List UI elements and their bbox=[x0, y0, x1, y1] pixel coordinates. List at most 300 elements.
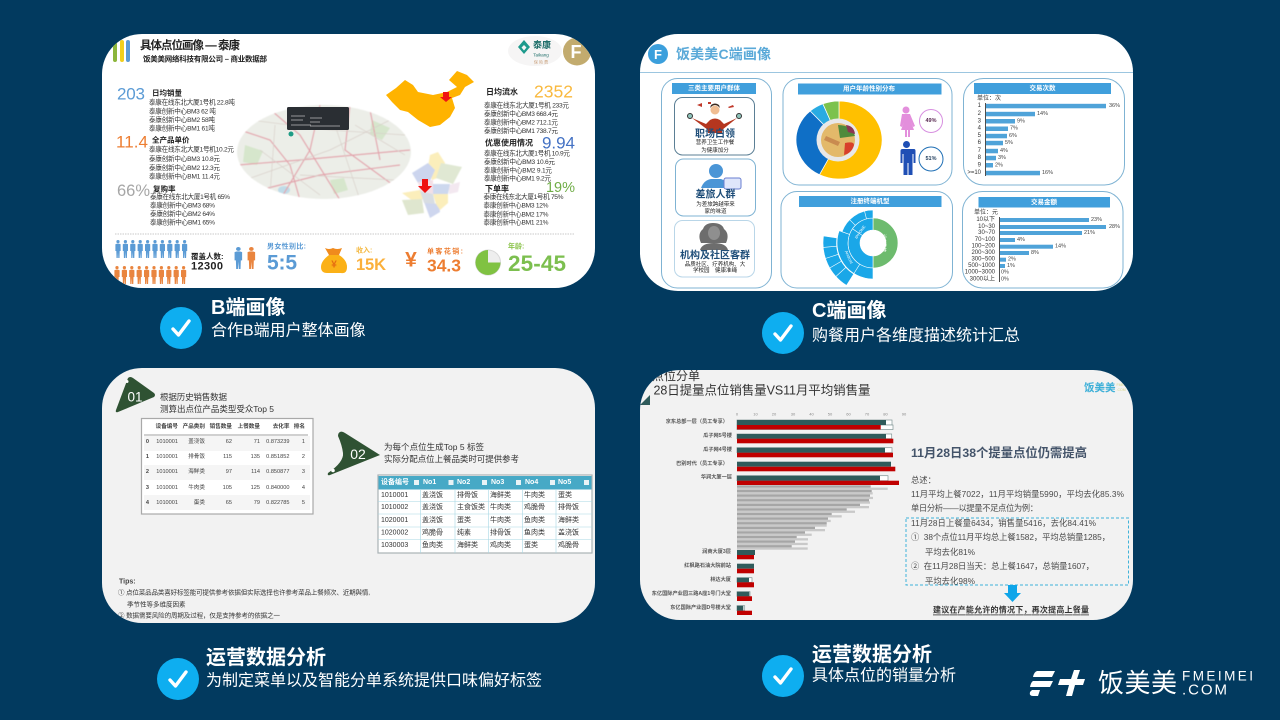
tips bbox=[118, 578, 370, 620]
heading bar: 交易金额 bbox=[1031, 197, 1058, 206]
bar chart: trade amount: 10~30 bbox=[978, 224, 996, 230]
logo mark bbox=[1030, 670, 1085, 696]
table: labels per point: 牛肉类 bbox=[490, 515, 511, 524]
table: labels per point: 排骨饭 bbox=[457, 490, 478, 499]
metric: unit price bbox=[116, 132, 234, 180]
table: top 5: 0.850877 bbox=[266, 469, 290, 475]
bar chart: trade count: 2 bbox=[978, 111, 982, 117]
table: labels per point: 设备编号 bbox=[381, 477, 409, 486]
table: top 5: 设备编号 bbox=[156, 422, 178, 430]
card: device sunburst bbox=[781, 192, 952, 288]
icon: male bbox=[899, 141, 916, 175]
table: top 5: 3 bbox=[146, 485, 149, 491]
logo: Taikang: 保 险 费 bbox=[534, 58, 548, 64]
logo bbox=[1084, 381, 1131, 394]
bar chart: trade amount: 100~200 bbox=[971, 244, 996, 250]
metric: daily sales: 泰康创新中心BM1 61吨 bbox=[149, 124, 215, 132]
table: top 5: 79 bbox=[254, 500, 260, 506]
table: top 5: 去化率 bbox=[273, 422, 290, 430]
tooltip on map bbox=[287, 107, 349, 136]
axis ticks: 90 bbox=[902, 412, 907, 416]
panel: C端画像 bbox=[640, 34, 1133, 291]
sunburst labels: 设备品牌 bbox=[880, 234, 888, 252]
metric: discount use bbox=[484, 134, 575, 182]
text block: summary bbox=[911, 475, 1125, 513]
table: top 5: 1010001 bbox=[156, 469, 178, 475]
caption: 运营数据分析 2: 具体点位的销量分析 bbox=[812, 666, 956, 684]
axis ticks: 50 bbox=[828, 412, 833, 416]
logo: F badge: F bbox=[570, 42, 582, 62]
table: labels per point: 鱼肉类 bbox=[524, 528, 545, 536]
gauge: male share bbox=[919, 147, 943, 171]
heading bar bbox=[974, 83, 1111, 94]
text block: summary: 单日分析——以提量不足点位为例： bbox=[911, 503, 1038, 513]
table: top 5: 5 bbox=[302, 500, 305, 506]
table: top 5: 海鲜类 bbox=[188, 467, 205, 475]
metric: daily revenue: 2352 bbox=[534, 82, 573, 102]
group card: institutions: 学校园 健康准绳 bbox=[693, 266, 737, 274]
title: 具体点位画像 — 泰康 bbox=[140, 38, 240, 52]
gauge: female share: 49% bbox=[925, 118, 937, 124]
axis ticks: 60 bbox=[846, 412, 851, 416]
stat: coverage: 12300 bbox=[191, 260, 223, 272]
table: top 5: 2 bbox=[302, 454, 305, 460]
icon: check bbox=[160, 307, 202, 349]
bar chart: trade count: 6 bbox=[978, 140, 982, 146]
bar labels: 润商大厦3层 bbox=[702, 547, 731, 555]
stat: income bbox=[356, 246, 386, 270]
bar chart: trade count: 7 bbox=[978, 148, 982, 154]
icon: check bbox=[157, 658, 199, 700]
stat: income: 收入: bbox=[356, 246, 372, 254]
axis ticks: 40 bbox=[809, 412, 814, 416]
table: top 5: 0.873239 bbox=[266, 439, 290, 445]
food plate bbox=[816, 118, 860, 162]
heading bar: 用户年龄性别分布 bbox=[843, 84, 896, 92]
metric: unit price: 11.4 bbox=[116, 132, 148, 152]
stat: spend per customer: 单客花销: bbox=[427, 246, 463, 256]
table: top 5: 0.822785 bbox=[266, 500, 290, 506]
group card: travellers bbox=[676, 159, 756, 216]
table: top 5 bbox=[142, 418, 313, 514]
heading bar bbox=[672, 83, 756, 94]
group card: office workers: 营养卫生工作餐 bbox=[696, 138, 735, 146]
logo: .COM bbox=[1116, 388, 1126, 392]
metric: repurchase rate: 泰康在线东北大厦1号机 65% bbox=[150, 192, 230, 201]
metric: daily sales: 泰康创新中心BM3 62 吨 bbox=[149, 106, 216, 116]
panel: B端画像 bbox=[102, 34, 595, 288]
heading bar bbox=[798, 84, 942, 94]
bar chart: trade amount: 70~100 bbox=[975, 237, 996, 243]
table: labels per point: 纯素 bbox=[457, 528, 471, 536]
sunburst labels: Android bbox=[844, 250, 854, 264]
metric: unit price: 泰康在线东北大厦1号机10.2元 bbox=[149, 144, 234, 154]
card: trade count bbox=[964, 78, 1124, 185]
axis ticks: 20 bbox=[772, 412, 777, 416]
table: labels per point: 1020001 bbox=[381, 517, 408, 524]
divider bbox=[640, 72, 1133, 73]
subtitle: 饭美美网络科技有限公司 – 商业数据部 bbox=[143, 54, 268, 64]
metric: repurchase rate: 泰康创新中心BM3 68% bbox=[150, 200, 215, 210]
table: top 5: 产品类别 bbox=[183, 422, 205, 430]
bar chart: trade count: 36% bbox=[1109, 103, 1120, 109]
logo: Fmeimei: FMEIMEI bbox=[1182, 668, 1253, 684]
table: labels per point: 海鲜类 bbox=[457, 540, 478, 549]
bar labels: 华润大厦一层 bbox=[701, 473, 732, 481]
stat: spend per customer bbox=[427, 247, 462, 272]
metric: repurchase rate: 复购率 bbox=[153, 184, 176, 194]
heading bar bbox=[978, 197, 1110, 208]
metric: order rate: 泰康创新中心BM3 12% bbox=[484, 200, 549, 210]
sunburst labels: IPHONE bbox=[854, 224, 867, 240]
axis ticks: 80 bbox=[883, 412, 888, 416]
stat: gender ratio: 5:5 bbox=[267, 252, 297, 274]
bar chart: trade count: 1 bbox=[978, 103, 982, 109]
tag fragment bbox=[640, 395, 650, 405]
metric: daily sales: 203 bbox=[117, 84, 145, 104]
stat: income: 15K bbox=[356, 256, 386, 274]
tag 02: 02 bbox=[350, 446, 366, 462]
bar chart: trade count: 4% bbox=[1000, 148, 1008, 154]
bar chart: trade amount: 200~300 bbox=[971, 250, 996, 256]
table: top 5: 97 bbox=[226, 469, 232, 475]
metric: order rate: 泰康创新中心BM1 21% bbox=[484, 218, 549, 226]
callout: dashed box: 平均去化98% bbox=[925, 576, 976, 586]
bar chart: trade amount: 28% bbox=[1109, 224, 1120, 230]
icon group: blue people bbox=[115, 240, 187, 258]
table: labels per point: 盖浇饭 bbox=[422, 515, 443, 524]
table: labels per point: 鸡肉类 bbox=[490, 540, 511, 549]
table: top 5: 114 bbox=[251, 469, 260, 475]
recommendation: 建议在产能允许的情况下，再次提高上餐量 bbox=[933, 604, 1089, 614]
bar chart: trade amount bbox=[965, 216, 1120, 283]
metric: order rate: 下单率 bbox=[485, 184, 509, 194]
metric: order rate: 泰康在线东北大厦1号机 75% bbox=[484, 192, 564, 201]
caption: C端画像: 购餐用户各维度描述统计汇总 bbox=[812, 326, 1020, 344]
table: labels per point: 蛋类 bbox=[524, 540, 538, 549]
text block: summary: 总述： bbox=[911, 475, 936, 485]
logo: FMEIMEI bbox=[1116, 383, 1131, 387]
panel: 点位分单 bbox=[640, 368, 1133, 620]
grey bars bbox=[737, 488, 888, 550]
bar labels: 京东总部一层（员工专享） bbox=[666, 417, 728, 425]
heading: analysis: 11月28日38个提量点位仍需提高 bbox=[911, 445, 1087, 460]
bar chart: trade count: 16% bbox=[1042, 170, 1053, 176]
title: 饭美美C端画像 bbox=[676, 46, 771, 62]
table: labels per point: 盖浇饭 bbox=[422, 490, 443, 499]
title: 28日提量点位销售量VS11月平均销售量 bbox=[654, 382, 870, 398]
callout: dashed box: 11月28日上餐量6434，销售量5416，去化84.41% bbox=[911, 518, 1097, 528]
stat: coverage bbox=[191, 252, 223, 270]
caption: 运营数据分析 1: 为制定菜单以及智能分单系统提供口味偏好标签 bbox=[206, 672, 542, 690]
table: top 5: 2 bbox=[146, 469, 149, 475]
donut chart bbox=[796, 101, 882, 179]
bar chart: trade count: 8 bbox=[978, 155, 982, 161]
bar chart: trade amount: 21% bbox=[1084, 230, 1095, 236]
bar chart: trade count: 7% bbox=[1010, 126, 1018, 132]
metric: discount use: 泰康创新中心BM1 9.2元 bbox=[484, 174, 551, 182]
caption: 运营数据分析 2: 运营数据分析 bbox=[812, 643, 932, 666]
metric: repurchase rate bbox=[117, 182, 230, 226]
table: top 5: 135 bbox=[251, 454, 260, 460]
metric: unit price: 全产品单价 bbox=[152, 134, 190, 144]
table: labels per point: No5 bbox=[558, 479, 571, 486]
logo: Taikang: 泰康 bbox=[533, 39, 551, 50]
table: labels per point: 排骨饭 bbox=[490, 528, 511, 536]
gauge: male share: 51% bbox=[925, 156, 937, 162]
table: labels per point: 排骨饭 bbox=[558, 502, 579, 511]
metric: order rate: 泰康创新中心BM2 17% bbox=[484, 210, 549, 218]
logo: Fmeimei bbox=[1030, 668, 1253, 698]
caption: 运营数据分析 2 bbox=[762, 643, 956, 697]
heading bar: 三类主要用户群体 bbox=[688, 83, 740, 92]
caption: B端画像 bbox=[160, 296, 366, 349]
table: top 5: 销售数量 bbox=[210, 422, 232, 430]
bar chart: trade count: 3% bbox=[998, 155, 1006, 161]
arrow: down bbox=[1004, 585, 1021, 602]
table: labels per point: 鸡脆骨 bbox=[558, 540, 579, 549]
bar chart: trade amount: 8% bbox=[1031, 250, 1039, 256]
bar chart: trade count: 5 bbox=[978, 133, 982, 139]
bar labels bbox=[652, 417, 733, 611]
table: top 5: 上餐数量 bbox=[238, 422, 260, 430]
table: labels per point: No3 bbox=[491, 479, 504, 486]
bar chart: trade amount: 300~500 bbox=[971, 257, 996, 263]
unit: 单位：元 bbox=[974, 208, 998, 216]
gauge: female share bbox=[920, 110, 942, 132]
table: top 5: 65 bbox=[226, 500, 232, 506]
unit: 单位：次 bbox=[977, 94, 1001, 102]
metric: daily revenue bbox=[484, 82, 573, 135]
caption: B端画像: 合作B端用户整体画像 bbox=[211, 322, 366, 340]
table: top 5: 4 bbox=[146, 500, 150, 506]
group card: institutions bbox=[674, 220, 754, 277]
text block: summary: 11月平均上餐7022，11月平均销量5990，平均去化85.3% bbox=[911, 489, 1125, 499]
bar chart: point sales bbox=[737, 420, 899, 615]
metric: daily revenue: 泰康创新中心BM2 712.1元 bbox=[484, 118, 558, 126]
bar chart: trade amount: 10以下 bbox=[976, 216, 995, 223]
table: labels per point: 1010002 bbox=[381, 504, 408, 511]
group card: office workers bbox=[674, 98, 754, 155]
stat: age bbox=[508, 242, 566, 271]
caption: C端画像: C端画像 bbox=[812, 299, 886, 322]
bar chart: trade amount: 14% bbox=[1055, 244, 1066, 250]
bar chart: trade count: 3 bbox=[978, 118, 982, 124]
bar chart: trade count: 2% bbox=[995, 162, 1003, 168]
step 2 text: 实际分配点位上餐品类时可提供参考 bbox=[384, 454, 519, 464]
caption: 运营数据分析 1: 运营数据分析 bbox=[206, 646, 326, 669]
icon: yen: ¥ bbox=[405, 248, 417, 272]
table: top 5: 0 bbox=[146, 439, 149, 445]
logo: Taikang bbox=[508, 36, 562, 66]
caption: 运营数据分析 1 bbox=[157, 646, 542, 700]
metric: discount use: 9.94 bbox=[542, 134, 575, 152]
bar chart: trade count: 4 bbox=[978, 126, 982, 132]
step 1 text: 根据历史销售数据 bbox=[160, 392, 227, 402]
map: Beijing districts bbox=[402, 152, 462, 218]
icon: female bbox=[900, 106, 915, 137]
table: top 5: 3 bbox=[302, 469, 305, 475]
stat: gender ratio bbox=[267, 242, 306, 270]
table: top 5: 1 bbox=[146, 454, 149, 460]
bar chart: trade amount: 1000~3000 bbox=[965, 270, 996, 276]
tips: 季节性等多维度因素 bbox=[127, 600, 186, 608]
title bbox=[652, 368, 870, 398]
table: top 5: 125 bbox=[251, 485, 260, 491]
panel: 口味标签分析 bbox=[102, 368, 595, 623]
tag 01 bbox=[116, 377, 155, 412]
step 1 text bbox=[160, 392, 274, 414]
metric: discount use: 优惠使用情况 bbox=[485, 138, 533, 148]
icon group: orange people bbox=[114, 266, 186, 284]
stat: spend per customer: 34.3 bbox=[427, 256, 461, 276]
bar chart: trade amount: 30~70 bbox=[978, 230, 996, 236]
heading bar: 注册终端机型 bbox=[850, 196, 890, 205]
icon: red location arrow bbox=[418, 179, 432, 193]
bar labels: 瓜子网4号楼 bbox=[703, 445, 733, 453]
table: labels per point: 鱼肉类 bbox=[524, 515, 545, 524]
group card: travellers: 为差旅跨越带来 bbox=[696, 200, 735, 208]
table: top 5: 105 bbox=[223, 485, 232, 491]
icon: three colour bars bbox=[113, 40, 130, 62]
sunburst labels bbox=[844, 224, 888, 264]
bar chart: trade amount: 0% bbox=[1001, 270, 1009, 276]
metric: daily revenue: 日均流水 bbox=[486, 86, 518, 96]
icon: money bag: ¥ bbox=[331, 260, 337, 270]
bar labels: 东亿国际产业园D号楼大堂 bbox=[670, 603, 731, 611]
group card: office workers: 为健康加分 bbox=[701, 146, 729, 154]
group card: institutions: 品质社区、疗养机构、大 bbox=[685, 260, 746, 268]
table: top 5: 71 bbox=[254, 439, 260, 445]
table: top 5: 1 bbox=[302, 439, 305, 445]
tips: ② 数据需要风险的周期及过程，仅是支持参考的依据之一 bbox=[118, 610, 280, 620]
metric: daily sales: 泰康在线东北大厦1号机 22.8吨 bbox=[149, 98, 235, 106]
bar chart: trade amount: 3000以上 bbox=[970, 275, 995, 283]
metric: discount use: 泰康创新中心BM2 9.1元 bbox=[484, 166, 552, 174]
divider bbox=[115, 234, 574, 235]
group card: office workers: 职场白领 bbox=[695, 127, 735, 140]
table: labels per point: 蛋类 bbox=[558, 490, 572, 499]
icon: pie bbox=[476, 250, 500, 275]
bar chart: trade count: 14% bbox=[1037, 111, 1048, 117]
stat: coverage: 覆盖人数: bbox=[191, 251, 224, 261]
logo: F badge bbox=[563, 38, 591, 66]
logo: Fmeimei: 饭美美 bbox=[1098, 668, 1177, 698]
bar labels: 东亿国际产业园三路A座1号门大堂 bbox=[652, 589, 731, 597]
group card: institutions: 机构及社区客群 bbox=[680, 248, 750, 262]
tips: Tips: bbox=[119, 578, 136, 586]
logo badge bbox=[648, 44, 668, 64]
metric: daily sales: 日均销量 bbox=[152, 88, 182, 98]
metric: order rate bbox=[484, 180, 575, 226]
metric: repurchase rate: 泰康创新中心BM2 64% bbox=[150, 209, 215, 218]
heading bar: 交易次数 bbox=[1030, 83, 1056, 92]
metric: daily revenue: 泰康创新中心BM1 738.7元 bbox=[484, 126, 558, 135]
metric: unit price: 泰康创新中心BM2 12.3元 bbox=[149, 163, 220, 172]
table: labels per point: 盖浇饭 bbox=[422, 502, 443, 511]
callout: dashed box: ② 在11月28日当天：总上餐1647，总销量1607， bbox=[911, 561, 1094, 571]
table: top 5: 115 bbox=[223, 454, 232, 460]
bar chart: trade count bbox=[967, 103, 1120, 176]
table: labels per point: 鸡脆骨 bbox=[524, 502, 545, 511]
metric: unit price: 泰康创新中心BM1 11.4元 bbox=[149, 172, 220, 180]
table: labels per point: 盖浇饭 bbox=[558, 528, 579, 536]
tag 02 bbox=[328, 432, 380, 475]
stat: gender ratio: 男女性别比: bbox=[267, 242, 306, 250]
table: top 5: 0.840000 bbox=[266, 485, 290, 491]
table: top 5: 蛋类 bbox=[194, 498, 205, 506]
bar chart: trade amount: 23% bbox=[1091, 217, 1102, 223]
stat: age: 年龄: bbox=[508, 242, 524, 250]
bar chart: trade count: 6% bbox=[1009, 133, 1017, 139]
table: top 5: 排骨饭 bbox=[188, 452, 205, 460]
heading bar bbox=[799, 196, 942, 207]
bar labels: 林达大厦 bbox=[710, 575, 732, 583]
group card: travellers: 家的味道 bbox=[704, 207, 727, 215]
caption: B端画像: B端画像 bbox=[211, 296, 285, 319]
table: labels per point: 牛肉类 bbox=[490, 502, 511, 511]
step 2 text bbox=[384, 442, 519, 464]
metric: daily sales: 泰康创新中心BM2 58吨 bbox=[149, 115, 215, 124]
bar chart: trade count: >=10 bbox=[967, 170, 982, 176]
title: 点位分单 bbox=[652, 368, 700, 383]
logo: Taikang: Taikang bbox=[533, 52, 549, 58]
table: top 5: 1010001 bbox=[156, 485, 178, 491]
metric: repurchase rate: 泰康创新中心BM1 65% bbox=[150, 218, 215, 226]
table: top 5: 排名 bbox=[294, 422, 305, 430]
icon: gender pair bbox=[235, 247, 255, 269]
table: labels per point: 海鲜类 bbox=[490, 490, 511, 499]
caption: C端画像 bbox=[762, 299, 1020, 354]
metric: repurchase rate: 66% bbox=[117, 182, 150, 200]
table: top 5: 4 bbox=[302, 485, 305, 491]
table: labels per point: No4 bbox=[525, 479, 538, 486]
table: labels per point: 1030003 bbox=[381, 542, 408, 549]
table: labels per point: 鱼肉类 bbox=[422, 540, 443, 549]
metric: daily revenue: 泰康创新中心BM3 668.4元 bbox=[484, 109, 558, 118]
callout: dashed box: ① 38个点位11月平均总上餐1582，平均总销量1285， bbox=[911, 532, 1110, 542]
stat: age: 25-45 bbox=[508, 251, 566, 276]
table: labels per point: 主食饭类 bbox=[457, 502, 485, 511]
bar labels: 巴别时代（员工专享） bbox=[676, 459, 728, 467]
card: user groups bbox=[662, 78, 772, 288]
table: top 5: 62 bbox=[226, 439, 232, 445]
tag 01: 01 bbox=[127, 390, 143, 404]
bar chart: trade count: 5% bbox=[1005, 140, 1013, 146]
bar chart: trade count: 9% bbox=[1017, 118, 1025, 124]
table: labels per point: 蛋类 bbox=[457, 515, 471, 524]
step 2 text: 为每个点位生成Top 5 标签 bbox=[384, 442, 484, 452]
bar chart: trade amount: 2% bbox=[1008, 257, 1016, 263]
table: labels per point: 鸡脆骨 bbox=[422, 528, 443, 536]
bar chart: trade amount: 1% bbox=[1007, 263, 1015, 269]
table: labels per point: 海鲜类 bbox=[558, 515, 579, 524]
tips: ① 点位菜品品类喜好标签能可提供参考依据但实际选择也许参考菜品上餐频次、近期舆情, bbox=[118, 588, 370, 596]
axis ticks: 10 bbox=[753, 412, 758, 416]
bar labels: 瓜子网5号楼 bbox=[703, 431, 733, 439]
metric: discount use: 泰康在线东北大厦1号机 10.9元 bbox=[484, 148, 570, 158]
axis ticks: 70 bbox=[865, 412, 870, 416]
metric: order rate: 19% bbox=[546, 180, 575, 196]
table: top 5: 1010001 bbox=[156, 500, 178, 506]
logo badge: F bbox=[654, 47, 662, 62]
bar chart: trade amount: 4% bbox=[1017, 237, 1025, 243]
table: labels per point: No2 bbox=[457, 479, 470, 486]
metric: daily revenue: 泰康在线东北大厦1号机 233元 bbox=[484, 100, 569, 110]
logo: Fmeimei: .COM bbox=[1182, 682, 1227, 698]
bar labels: 红枫路石油大院前站 bbox=[684, 561, 732, 569]
axis ticks bbox=[736, 412, 907, 416]
